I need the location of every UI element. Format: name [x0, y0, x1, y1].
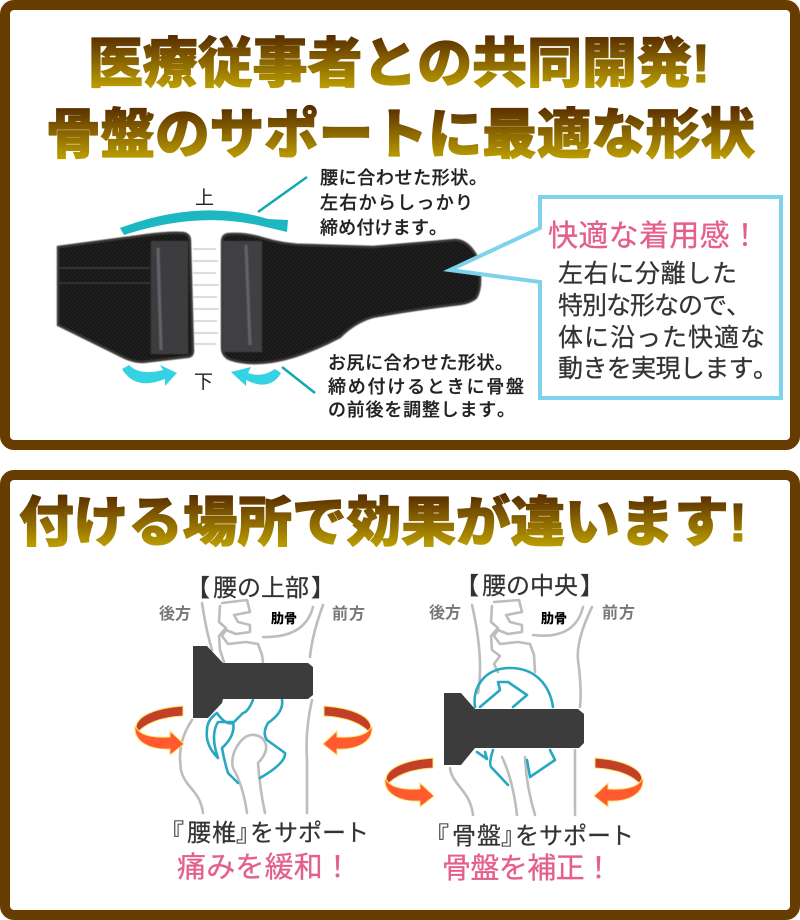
skeleton outline [180, 600, 323, 813]
label: ribs: 肋骨 [541, 611, 567, 626]
leader line: lower note [282, 367, 315, 393]
arrow: lower right curve [231, 367, 281, 386]
belt band [444, 693, 584, 765]
arrow: upper curve [120, 210, 288, 235]
note: upper shape: 腰に合わせた形状。 [320, 168, 487, 188]
title: co-development with medical professionals: 医療従事者との共同開発! [88, 34, 710, 94]
panel: shape design [5, 5, 795, 445]
label: lower: 下 [194, 372, 213, 393]
note: lower shape: の前後を調整します。 [328, 400, 515, 420]
note: upper shape: 締め付けます。 [320, 218, 447, 238]
panel: placement effects [5, 475, 795, 915]
belt band [193, 646, 313, 718]
belt right piece [222, 234, 480, 363]
rotation arrow: left [135, 706, 184, 755]
label: upper waist: 【腰の上部】 [186, 575, 335, 602]
rotation arrow: left [385, 758, 434, 807]
label: back: 後方 [159, 604, 191, 623]
label: ribs: 肋骨 [271, 611, 297, 626]
heading: effect varies by position: 付ける場所で効果が違います! [19, 492, 747, 553]
pelvis outline [207, 700, 285, 783]
diagram: mid waist [385, 573, 643, 885]
caption: pelvis support: 『骨盤』をサポート [425, 823, 634, 850]
callout body: 体に沿った快適な [558, 324, 765, 352]
belt left plate [151, 241, 188, 354]
rotation arrow: right [323, 706, 372, 755]
belt left piece [58, 233, 193, 362]
label: front: 前方 [332, 604, 365, 623]
pelvis outline [475, 668, 555, 785]
rotation arrow: right [594, 758, 643, 807]
label: upper: 上 [195, 187, 214, 209]
note: lower shape [328, 353, 524, 420]
skeleton outline [450, 600, 592, 815]
title: co-development with medical professionals: 骨盤のサポートに最適な形状 [46, 105, 755, 165]
callout body: 動きを実現します。 [558, 355, 778, 383]
note: upper shape: 左右からしっかり [320, 193, 473, 213]
title: co-development with medical professionals [46, 34, 755, 165]
belt right plate [223, 241, 262, 352]
leader line: upper note [258, 177, 307, 212]
callout body: 左右に分離した [558, 260, 737, 288]
caption: relieves pain: 痛みを緩和！ [177, 851, 352, 884]
belt photo [58, 233, 480, 363]
label: mid waist: 【腰の中央】 [455, 573, 604, 600]
callout body: 特別な形なので、 [558, 292, 751, 320]
label: front: 前方 [602, 603, 635, 622]
note: upper shape [320, 168, 487, 238]
label: back: 後方 [429, 603, 461, 622]
arrow: lower left curve [122, 365, 177, 386]
belt elastic lines [193, 249, 219, 344]
callout: comfortable fit [450, 197, 781, 398]
caption: corrects pelvis: 骨盤を補正！ [442, 852, 613, 885]
note: lower shape: 締め付けるときに骨盤 [328, 377, 524, 397]
diagram: upper waist [135, 575, 372, 884]
callout body [558, 260, 778, 383]
note: lower shape: お尻に合わせた形状。 [328, 353, 513, 373]
caption: lumbar support: 『腰椎』をサポート [160, 820, 369, 847]
callout heading: 快適な着用感！ [548, 220, 760, 253]
